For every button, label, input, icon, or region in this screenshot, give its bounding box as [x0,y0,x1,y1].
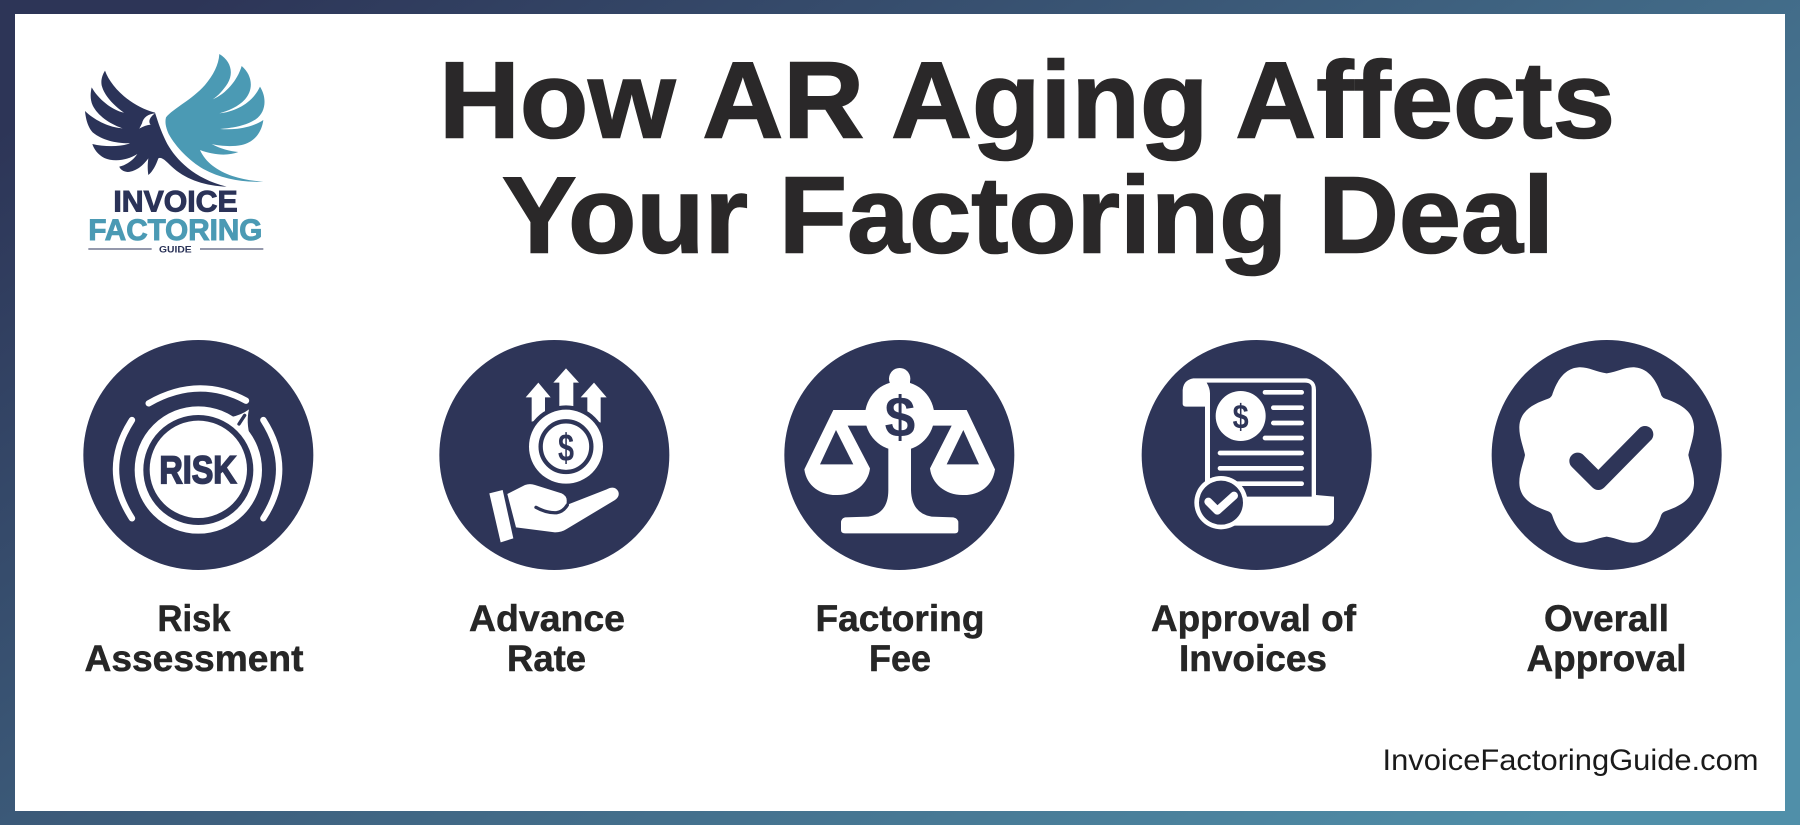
icon: advance rate hand and coin: $ [558,426,574,470]
title line 2: Your Factoring Deal [502,154,1554,276]
label: Advance Rate: Rate [507,638,586,679]
icon: invoice approval document: $ [1233,399,1249,437]
title [439,40,1615,276]
label: Overall Approval: Overall [1544,598,1669,639]
label: Advance Rate [469,598,625,679]
label: Advance Rate: Advance [469,598,625,639]
label: Overall Approval [1526,598,1686,679]
icon: teal eagle wing [165,54,265,182]
label: Factoring Fee [816,598,984,679]
label: Factoring Fee: Factoring [816,598,984,639]
icon: overall approval badge [1492,340,1722,570]
icon: eagle head highlight [139,113,155,129]
icon: factoring fee scale: $ [885,386,915,450]
icon: factoring fee scale [784,340,1014,570]
logo word: GUIDE: GUIDE [159,245,192,255]
icon: invoice approval document [1142,340,1372,570]
label: Factoring Fee: Fee [869,638,931,679]
icon: navy eagle wing and body [85,71,227,187]
title line 1: How AR Aging Affects [439,40,1615,162]
logo word: INVOICE: INVOICE [113,186,238,219]
icon: risk gauge: RISK [159,448,237,492]
website footer: InvoiceFactoringGuide.com [1382,744,1758,777]
label: Risk Assessment: Assessment [84,638,304,679]
icon: advance rate hand and coin [439,340,669,570]
label: Approval of Invoices [1151,598,1357,679]
label: Overall Approval: Approval [1526,638,1686,679]
label: Risk Assessment: Risk [158,598,231,639]
label: Risk Assessment [84,598,304,679]
logo: Invoice Factoring Guide [85,54,265,255]
label: Approval of Invoices: Approval of [1151,598,1357,639]
label: Approval of Invoices: Invoices [1179,638,1327,679]
icon: risk gauge [83,340,313,570]
logo word: FACTORING: FACTORING [88,214,262,247]
